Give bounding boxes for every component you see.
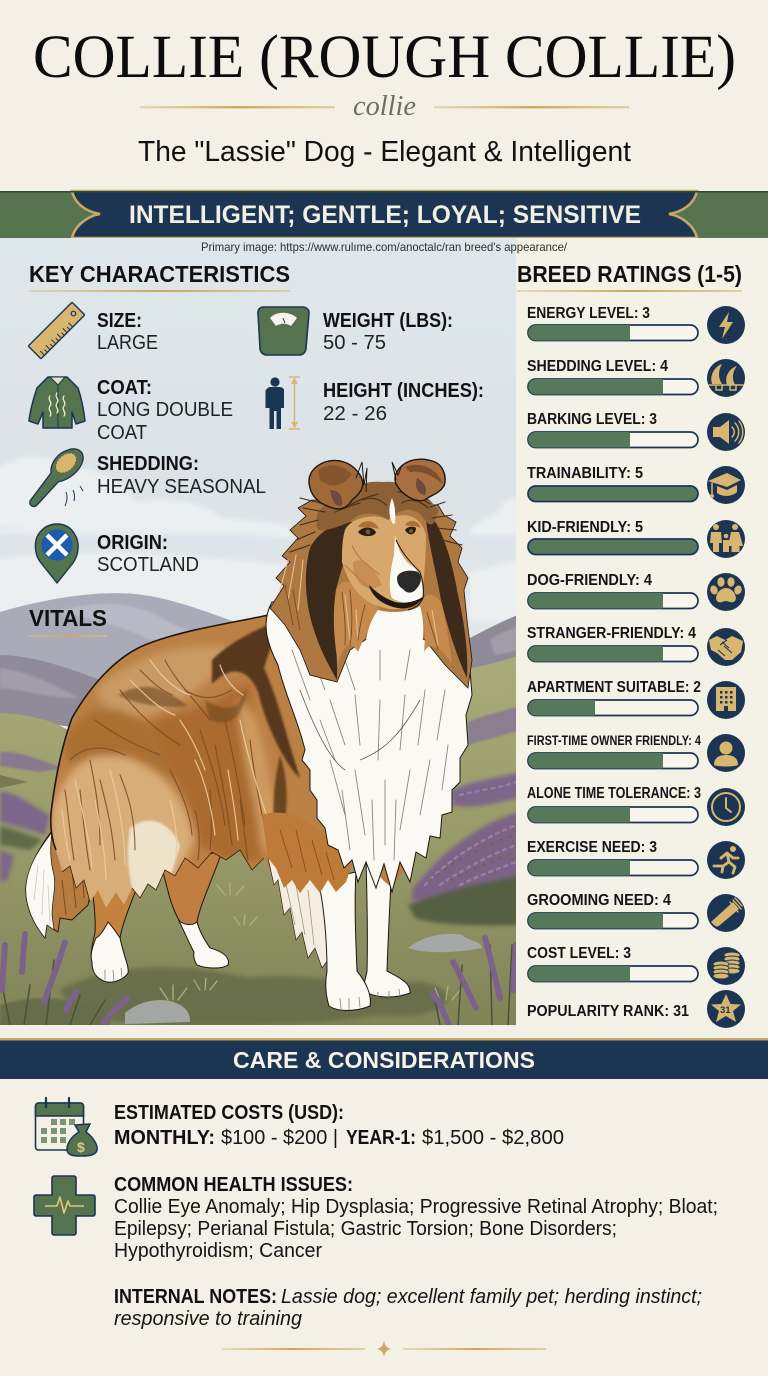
health issues text <box>114 1174 718 1262</box>
costs text: $1,500 - $2,800 <box>422 1127 564 1149</box>
internal notes text: INTERNAL NOTES: <box>114 1286 277 1308</box>
rating: grooming need: GROOMING NEED: 4 <box>527 892 671 909</box>
icon: ruler <box>28 302 85 359</box>
tagline: The "Lassie" Dog - Elegant & Intelligent <box>138 136 631 168</box>
rating: alone time tolerance <box>527 785 745 826</box>
height text <box>323 380 484 425</box>
footer ornament <box>222 1341 546 1357</box>
rating: popularity rank: POPULARITY RANK: 31 <box>527 1003 689 1020</box>
right ear <box>392 459 445 501</box>
costs text: $100 - $200 | <box>221 1127 338 1149</box>
far mountains <box>0 593 516 680</box>
rating: first-time owner friendly: FIRST-TIME OWNER FRIENDLY: 4 <box>527 733 701 748</box>
coat text: COAT <box>97 422 147 444</box>
weight text <box>323 310 453 354</box>
icon: coat <box>29 377 85 428</box>
right ratings panel background <box>516 238 768 1040</box>
ground shadow <box>62 967 448 1026</box>
temperament banner: INTELLIGENT; GENTLE; LOYAL; SENSITIVE <box>129 201 641 229</box>
illustration: highland scene with collie <box>0 238 520 1030</box>
rating: trainability <box>527 465 745 504</box>
height text: 22 - 26 <box>323 403 387 425</box>
internal notes text <box>114 1286 702 1330</box>
rating: alone time tolerance: ALONE TIME TOLERANCE: 3 <box>527 785 701 802</box>
icon: person with height arrow <box>266 377 300 429</box>
white ruff and chest <box>266 602 472 892</box>
costs text: MONTHLY: <box>114 1127 215 1149</box>
field <box>0 655 520 1030</box>
purple hills <box>0 655 98 726</box>
origin text <box>97 532 199 576</box>
rating: shedding level: SHEDDING LEVEL: 4 <box>527 358 668 375</box>
left ear <box>309 461 367 509</box>
heather patches <box>0 772 520 925</box>
rating: energy level: ENERGY LEVEL: 3 <box>527 305 650 322</box>
rating: cost level: COST LEVEL: 3 <box>527 945 631 962</box>
shedding text <box>97 453 266 498</box>
shoulder fur <box>262 812 352 893</box>
far hind leg <box>160 852 228 968</box>
origin text: ORIGIN: <box>97 532 168 554</box>
heather stems foreground <box>2 945 512 1025</box>
key characteristics panel <box>28 261 484 637</box>
rating: kid-friendly: KID-FRIENDLY: 5 <box>527 519 643 536</box>
weight text: WEIGHT (LBS): <box>323 310 453 332</box>
near hind leg <box>90 888 136 983</box>
mouth <box>369 585 425 608</box>
head fur spikes <box>290 498 462 552</box>
rating: exercise need: EXERCISE NEED: 3 <box>527 839 657 856</box>
near front leg <box>318 872 370 1010</box>
rating: apartment suitable: APARTMENT SUITABLE: 2 <box>527 679 701 696</box>
coat text: COAT: <box>97 377 152 399</box>
rating: stranger-friendly <box>527 625 745 666</box>
clouds <box>0 457 520 620</box>
rating: stranger-friendly: STRANGER-FRIENDLY: 4 <box>527 625 696 642</box>
icon: location pin with saltire <box>35 524 78 583</box>
rating: grooming need <box>527 892 745 932</box>
icon: calendar with money bag: $ <box>77 1139 85 1155</box>
rating: popularity rank: 31 <box>720 1005 731 1016</box>
near front leg feathering <box>268 858 326 969</box>
costs text: ESTIMATED COSTS (USD): <box>114 1102 344 1124</box>
rating: energy level <box>527 305 745 344</box>
grass tufts <box>160 883 460 1000</box>
rating: barking level <box>527 411 745 451</box>
health issues text: COMMON HEALTH ISSUES: <box>114 1174 353 1196</box>
coat text: LONG DOUBLE <box>97 399 233 421</box>
mane <box>270 500 472 688</box>
sky <box>0 238 516 678</box>
rating: shedding level <box>527 358 745 397</box>
far front leg <box>364 858 410 998</box>
rating: dog-friendly: DOG-FRIENDLY: 4 <box>527 572 652 589</box>
head <box>290 459 462 652</box>
rating: popularity rank <box>527 990 745 1028</box>
rating: first-time owner friendly <box>527 733 745 772</box>
heading: vitals: VITALS <box>29 605 107 631</box>
care and considerations header <box>0 1038 768 1079</box>
temperament banner <box>0 191 768 238</box>
rating: barking level: BARKING LEVEL: 3 <box>527 411 657 428</box>
tail <box>25 832 90 939</box>
chin bib <box>366 606 423 652</box>
height text: HEIGHT (INCHES): <box>323 380 484 402</box>
rating: trainability: TRAINABILITY: 5 <box>527 465 643 482</box>
collie dog <box>26 459 472 1010</box>
icon: medical cross <box>34 1176 95 1235</box>
rating: dog-friendly <box>527 572 745 611</box>
image source caption: Primary image: https://www.rulıme.com/anoctalc/ran breed's appearance/ <box>201 240 568 254</box>
nose <box>397 571 421 593</box>
heading: key characteristics: KEY CHARACTERISTICS <box>29 261 290 287</box>
icon: brush <box>30 449 83 506</box>
size text: SIZE: <box>97 310 142 332</box>
heading: breed ratings: BREED RATINGS (1-5) <box>517 261 742 287</box>
coat text <box>97 377 233 444</box>
costs text: YEAR-1: <box>346 1127 416 1149</box>
weight text: 50 - 75 <box>323 332 386 354</box>
care and considerations header: CARE & CONSIDERATIONS <box>233 1047 535 1073</box>
size text <box>97 310 158 354</box>
health issues text: Epilepsy; Perianal Fistula; Gastric Torsion; Bone Disorders; <box>114 1218 617 1240</box>
blaze and muzzle <box>390 535 423 603</box>
health issues text: Hypothyroidism; Cancer <box>114 1240 322 1262</box>
rating: exercise need <box>527 839 745 879</box>
icon: weight scale <box>258 307 309 355</box>
internal notes text: Lassie dog; excellent family pet; herding instinct; <box>281 1286 702 1308</box>
origin text: SCOTLAND <box>97 554 199 576</box>
internal notes text: responsive to training <box>114 1308 302 1330</box>
eyes <box>358 527 416 536</box>
icon: calendar with money bag <box>36 1098 97 1156</box>
costs text <box>114 1102 564 1149</box>
health issues text: Collie Eye Anomaly; Hip Dysplasia; Progressive Retinal Atrophy; Bloat; <box>114 1196 718 1218</box>
rating: kid-friendly <box>527 519 745 558</box>
rocks <box>125 934 482 1024</box>
rating: apartment suitable <box>527 679 745 719</box>
shedding text: SHEDDING: <box>97 453 199 475</box>
subtitle divider with breed name: collie <box>353 90 416 122</box>
rating: cost level <box>527 945 745 985</box>
shedding text: HEAVY SEASONAL <box>97 476 266 498</box>
size text: LARGE <box>97 332 158 354</box>
title: COLLIE (ROUGH COLLIE) <box>33 24 736 91</box>
care section <box>34 1098 718 1330</box>
body coat <box>50 614 326 908</box>
breed ratings panel <box>517 261 745 1028</box>
